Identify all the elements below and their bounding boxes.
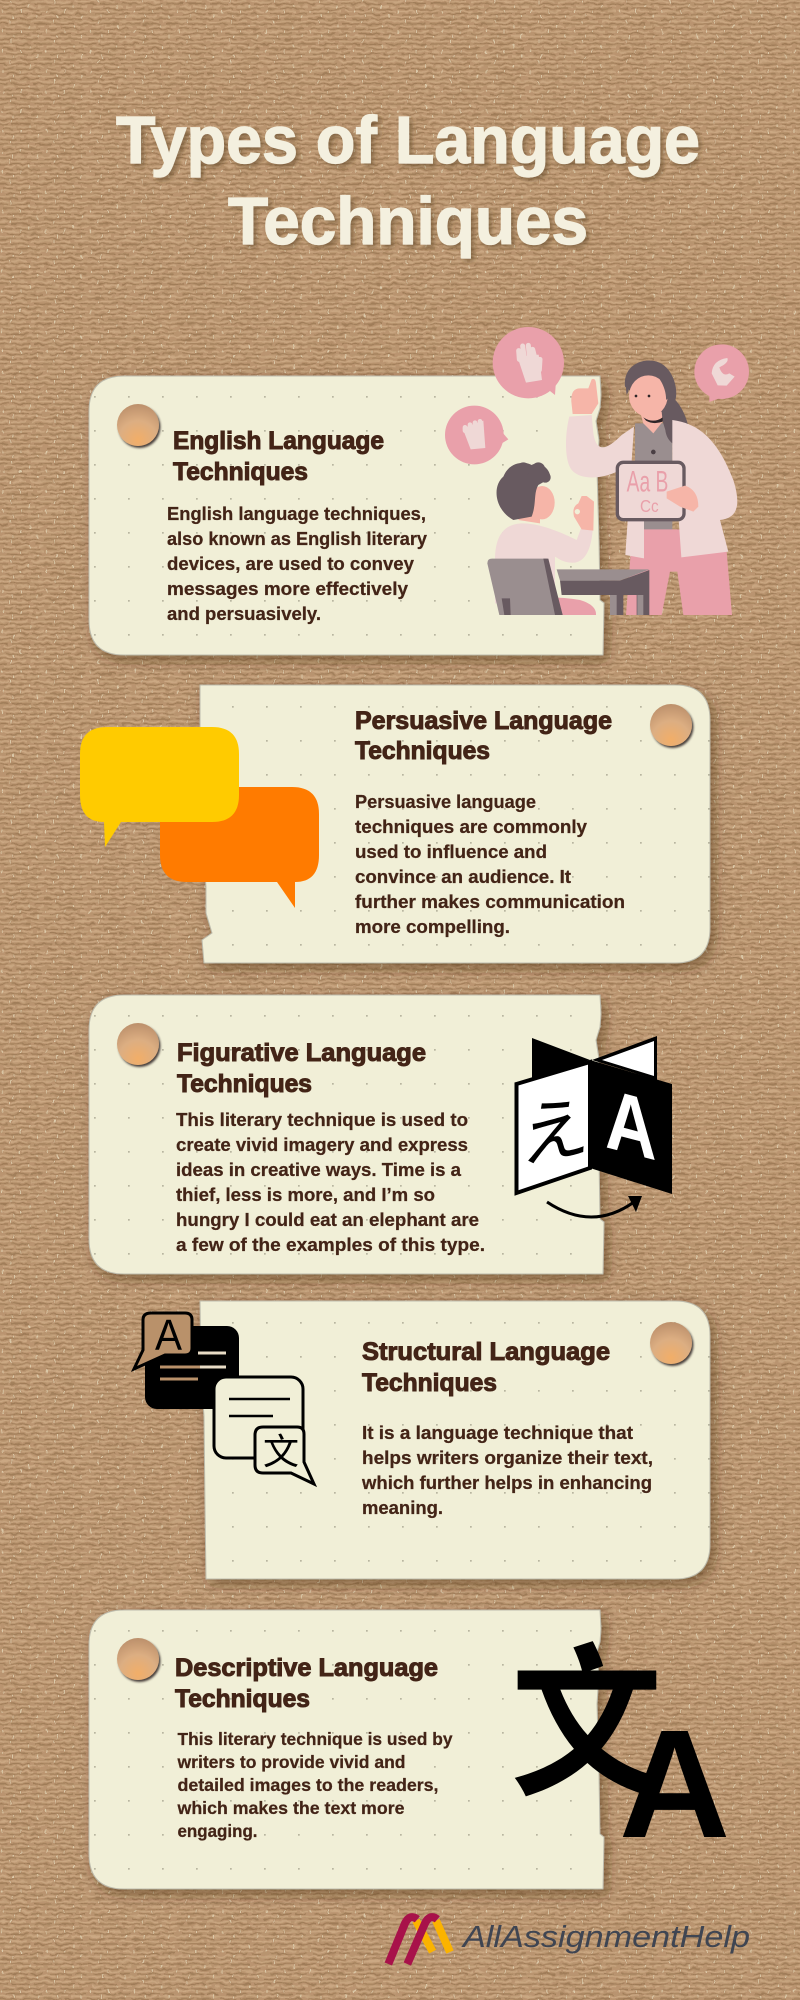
heading 1 <box>173 427 384 486</box>
speech bubble: raised hand <box>493 327 564 398</box>
teacher: Cc <box>640 496 659 516</box>
heading 4: Techniques <box>362 1369 497 1397</box>
panel: Figurative language techniques <box>89 995 604 1274</box>
pin 5 <box>117 1638 159 1680</box>
icon: translation chat bubbles: 文 <box>263 1423 299 1475</box>
body text 3: create vivid imagery and express <box>176 1134 468 1155</box>
icon: translation book <box>516 1036 672 1217</box>
paper card 2 <box>200 685 710 963</box>
title: Types of Language <box>116 103 700 178</box>
heading 4 <box>362 1338 610 1397</box>
body text 4: It is a language technique that <box>362 1422 633 1443</box>
panel: Persuasive language techniques <box>80 685 710 963</box>
heading 3: Techniques <box>177 1070 312 1098</box>
body text 2: convince an audience. It <box>355 866 571 887</box>
body text 3: ideas in creative ways. Time is a <box>176 1159 462 1180</box>
body text 2: techniques are commonly <box>355 816 588 837</box>
body text 4: which further helps in enhancing <box>361 1472 652 1493</box>
body text 3: thief, less is more, and I’m so <box>176 1184 435 1205</box>
logo mark <box>388 1917 450 1964</box>
icon: overlapping speech bubbles <box>80 727 319 908</box>
body text 3: a few of the examples of this type. <box>176 1234 485 1255</box>
body text 2: further makes communication <box>355 891 625 912</box>
icon: translation book: え <box>520 1086 590 1178</box>
body text 4: meaning. <box>362 1497 443 1518</box>
speech bubble: fist <box>445 406 508 464</box>
title <box>116 103 700 259</box>
body text 1: messages more effectively <box>167 578 409 599</box>
logo wordmark: AllAssignmentHelp <box>461 1919 750 1954</box>
body text 3 <box>176 1109 485 1255</box>
pin 3 <box>117 1023 159 1065</box>
paper card 5 <box>89 1610 604 1889</box>
body text 5: This literary technique is used by <box>178 1729 453 1749</box>
heading 4: Structural Language <box>362 1338 610 1366</box>
paper card 1 <box>89 376 604 655</box>
heading 1: English Language <box>173 427 384 455</box>
body text 1 <box>167 503 428 624</box>
heading 5 <box>175 1654 438 1713</box>
body text 4: helps writers organize their text, <box>362 1447 653 1468</box>
body text 1: also known as English literary <box>167 528 428 549</box>
body text 2 <box>355 791 625 937</box>
icon: large translate symbol <box>511 1593 730 1870</box>
body text 5: which makes the text more <box>176 1798 405 1818</box>
body text 5: detailed images to the readers, <box>178 1775 438 1795</box>
icon: translation book: A <box>605 1070 657 1179</box>
heading 3: Figurative Language <box>177 1039 426 1067</box>
body text 1: devices, are used to convey <box>167 553 415 574</box>
icon: large translate symbol: 文 <box>511 1593 662 1830</box>
body text 4 <box>361 1422 653 1518</box>
heading 5: Descriptive Language <box>175 1654 438 1682</box>
heading 2: Techniques <box>355 737 490 765</box>
title: Techniques <box>228 184 588 259</box>
heading 2 <box>355 707 612 765</box>
student <box>487 462 649 615</box>
heading 2: Persuasive Language <box>355 707 612 735</box>
body text 5: writers to provide vivid and <box>176 1752 406 1772</box>
icon: translation chat bubbles: A <box>155 1311 183 1360</box>
paper card 3 <box>89 995 604 1274</box>
pin 2 <box>650 704 692 746</box>
icon: large translate symbol: A <box>619 1698 730 1870</box>
paper card 4 <box>200 1301 710 1579</box>
heading 3 <box>177 1039 426 1098</box>
body text 1: English language techniques, <box>167 503 426 524</box>
pin 1 <box>117 404 159 446</box>
body text 1: and persuasively. <box>167 603 321 624</box>
body text 2: more compelling. <box>355 916 510 937</box>
body text 2: used to influence and <box>355 841 547 862</box>
icon: teacher and student sign-language illustration <box>445 327 749 615</box>
teacher: Aa B <box>627 466 668 499</box>
panel: English language techniques <box>89 376 604 655</box>
teacher <box>566 361 737 615</box>
icon: translation chat bubbles <box>134 1311 314 1484</box>
body text 3: This literary technique is used to <box>176 1109 468 1130</box>
body text 5: engaging. <box>178 1821 258 1841</box>
pin 4 <box>650 1322 692 1364</box>
speech bubble: curved hand <box>694 344 749 402</box>
body text 5 <box>176 1729 453 1841</box>
panel: Structural language techniques <box>200 1301 710 1579</box>
panel: Descriptive language techniques <box>89 1610 604 1889</box>
body text 2: Persuasive language <box>355 791 536 812</box>
body text 3: hungry I could eat an elephant are <box>176 1209 479 1230</box>
heading 5: Techniques <box>175 1685 310 1713</box>
logo: AllAssignmentHelp <box>388 1917 750 1964</box>
heading 1: Techniques <box>173 458 308 486</box>
